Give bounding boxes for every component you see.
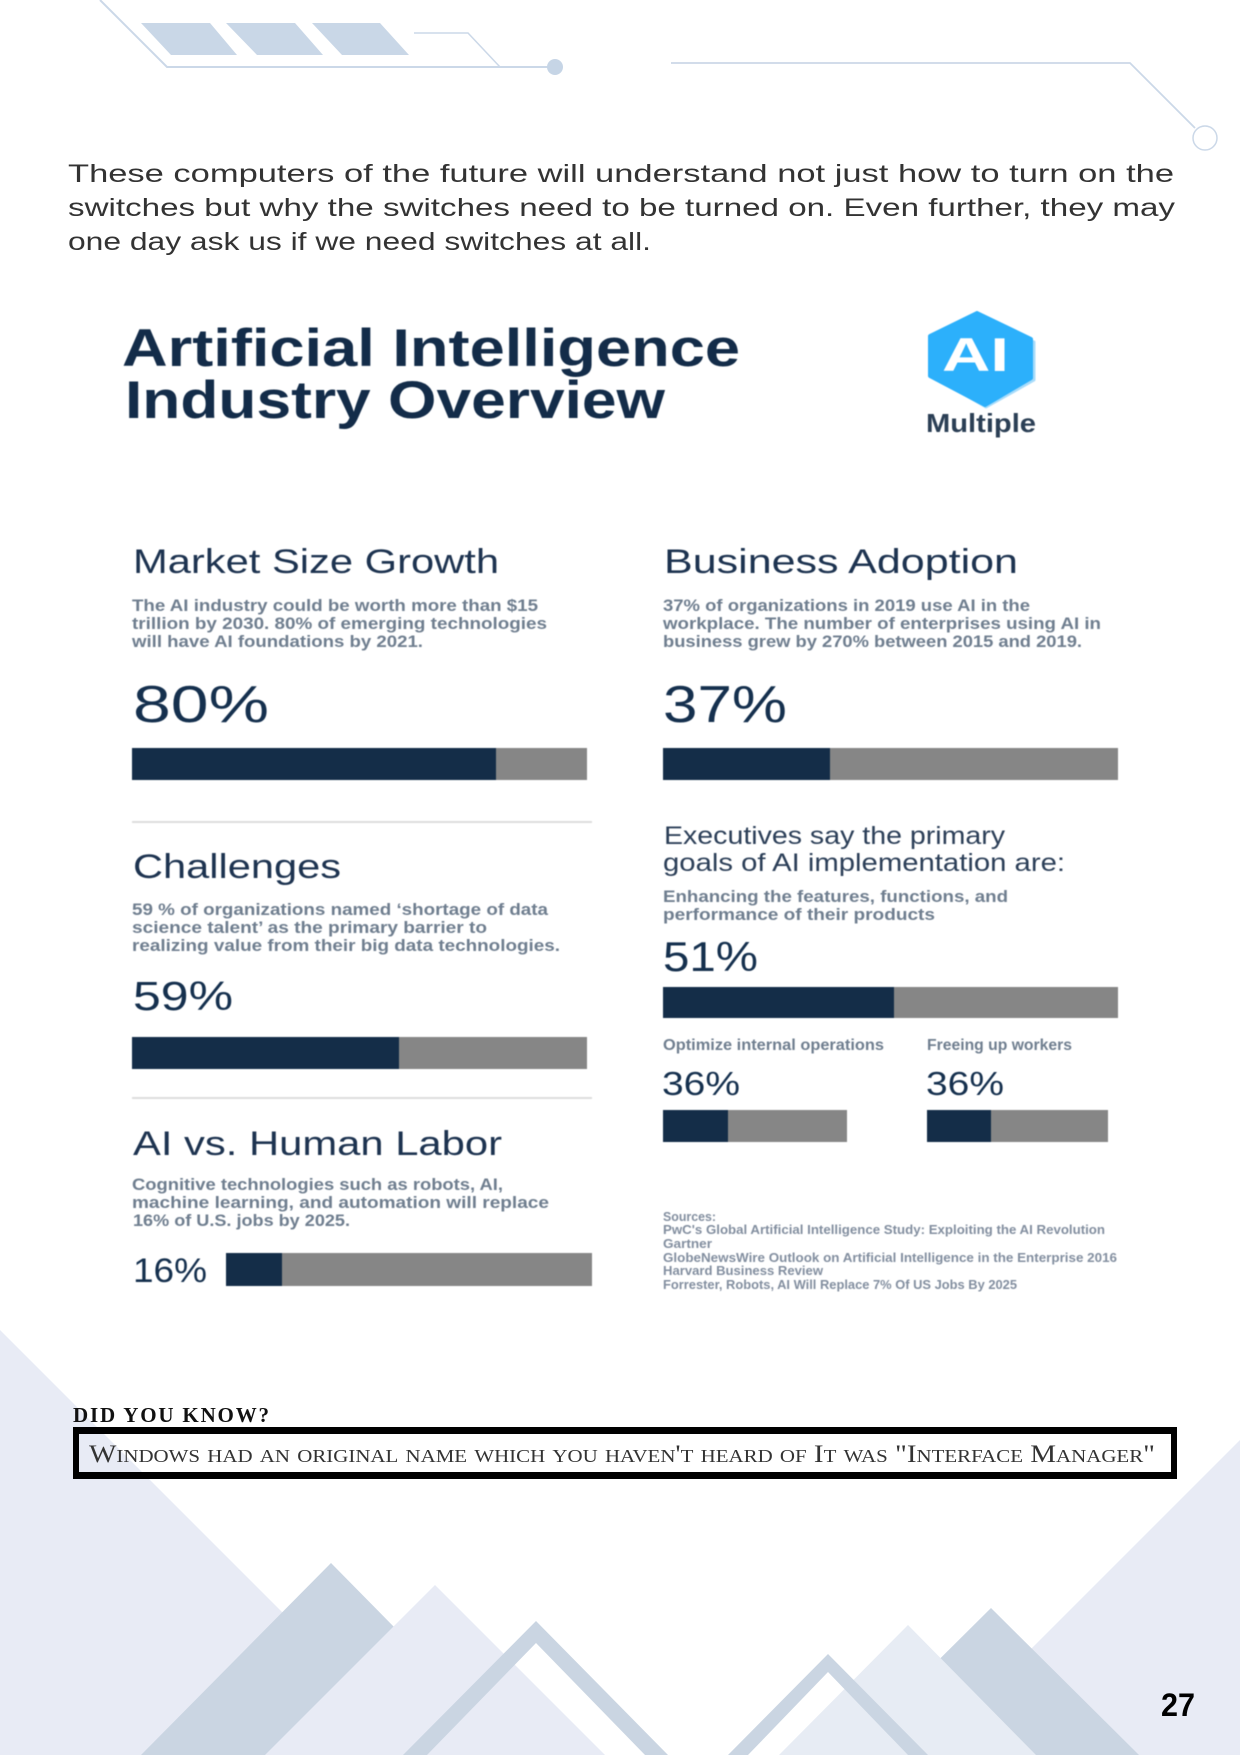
logo: AI Multiple (926, 313, 1036, 438)
infographic title: Industry Overview (125, 371, 666, 430)
panel: AI vs human labor: 16% of U.S. jobs by 2025. (133, 1211, 350, 1230)
infographic (122, 313, 1118, 1292)
intro paragraph: These computers of the future will understand not just how to turn on the (68, 160, 1174, 188)
panel: executive goals: Enhancing the features, functions, and (663, 887, 1008, 906)
sources: Sources: (663, 1210, 716, 1224)
panel: business adoption: 37% (663, 676, 787, 734)
panel: business adoption: Business Adoption (664, 543, 1018, 581)
panel: executive goals: 36% (926, 1065, 1004, 1102)
panel: executive goals: performance of their products (663, 905, 935, 924)
panel: challenges (132, 848, 587, 1069)
did you know callout box: Windows had an original name which you haven't heard of It was "Interface Manager" (89, 1441, 1155, 1468)
panel: executive goals: Freeing up workers (927, 1037, 1072, 1054)
panel: AI vs human labor: machine learning, and automation will replace (132, 1193, 549, 1212)
intro paragraph: one day ask us if we need switches at all. (68, 228, 651, 256)
sources: Harvard Business Review (663, 1264, 823, 1278)
panel: business adoption: workplace. The number of enterprises using AI in (662, 614, 1101, 633)
panel: challenges: realizing value from their big data technologies. (132, 936, 560, 955)
panel: AI vs human labor: 16% (133, 1252, 207, 1290)
did you know heading: DID YOU KNOW? (73, 1403, 269, 1427)
panel: market size growth (131, 543, 587, 780)
panel: challenges: science talent’ as the primary barrier to (132, 918, 487, 937)
infographic title (122, 319, 740, 430)
did you know callout box (73, 1427, 1177, 1479)
panel: market size growth: trillion by 2030. 80% of emerging technologies (132, 614, 547, 633)
logo: AI Multiple: AI (942, 328, 1009, 381)
background mountains: left group (0, 1330, 668, 1755)
sources: PwC's Global Artificial Intelligence Study: Exploiting the AI Revolution (663, 1223, 1105, 1237)
logo: AI Multiple: Multiple (926, 408, 1036, 438)
infographic title: Artificial Intelligence (122, 319, 740, 378)
panel: business adoption (662, 543, 1118, 780)
background mountains: right group (728, 1440, 1240, 1755)
panel: AI vs human labor (132, 1125, 592, 1290)
sources: Gartner (663, 1237, 712, 1251)
panel: market size growth: The AI industry could be worth more than $15 (132, 596, 538, 615)
panel: challenges: Challenges (133, 848, 341, 886)
panel: market size growth: Market Size Growth (133, 543, 499, 581)
panel: challenges: 59% (133, 973, 233, 1019)
panel: AI vs human labor: AI vs. Human Labor (133, 1125, 502, 1163)
panel: challenges: 59 % of organizations named ‘shortage of data (132, 900, 549, 919)
panel: market size growth: will have AI foundations by 2021. (131, 632, 423, 651)
panel: executive goals: Optimize internal operations (663, 1037, 884, 1054)
sources: GlobeNewsWire Outlook on Artificial Intelligence in the Enterprise 2016 (663, 1251, 1117, 1265)
panel: AI vs human labor: Cognitive technologies such as robots, AI, (132, 1175, 503, 1194)
intro paragraph: switches but why the switches need to be turned on. Even further, they may (68, 194, 1176, 222)
top-left circuit decoration (100, 0, 563, 75)
panel: executive goals: 36% (662, 1065, 740, 1102)
sources (663, 1210, 1117, 1292)
panel: executive goals: Executives say the primary (664, 822, 1006, 850)
panel: executive goals (662, 822, 1118, 1142)
intro paragraph (68, 160, 1176, 256)
panel: market size growth: 80% (133, 676, 269, 734)
top-right circuit decoration (671, 63, 1217, 150)
page number: 27 (1161, 1687, 1195, 1723)
panel: executive goals: goals of AI implementation are: (663, 849, 1065, 877)
panel: executive goals: 51% (663, 933, 758, 980)
panel: business adoption: 37% of organizations in 2019 use AI in the (663, 596, 1030, 615)
panel: business adoption: business grew by 270% between 2015 and 2019. (663, 632, 1082, 651)
sources: Forrester, Robots, AI Will Replace 7% Of US Jobs By 2025 (663, 1278, 1017, 1292)
